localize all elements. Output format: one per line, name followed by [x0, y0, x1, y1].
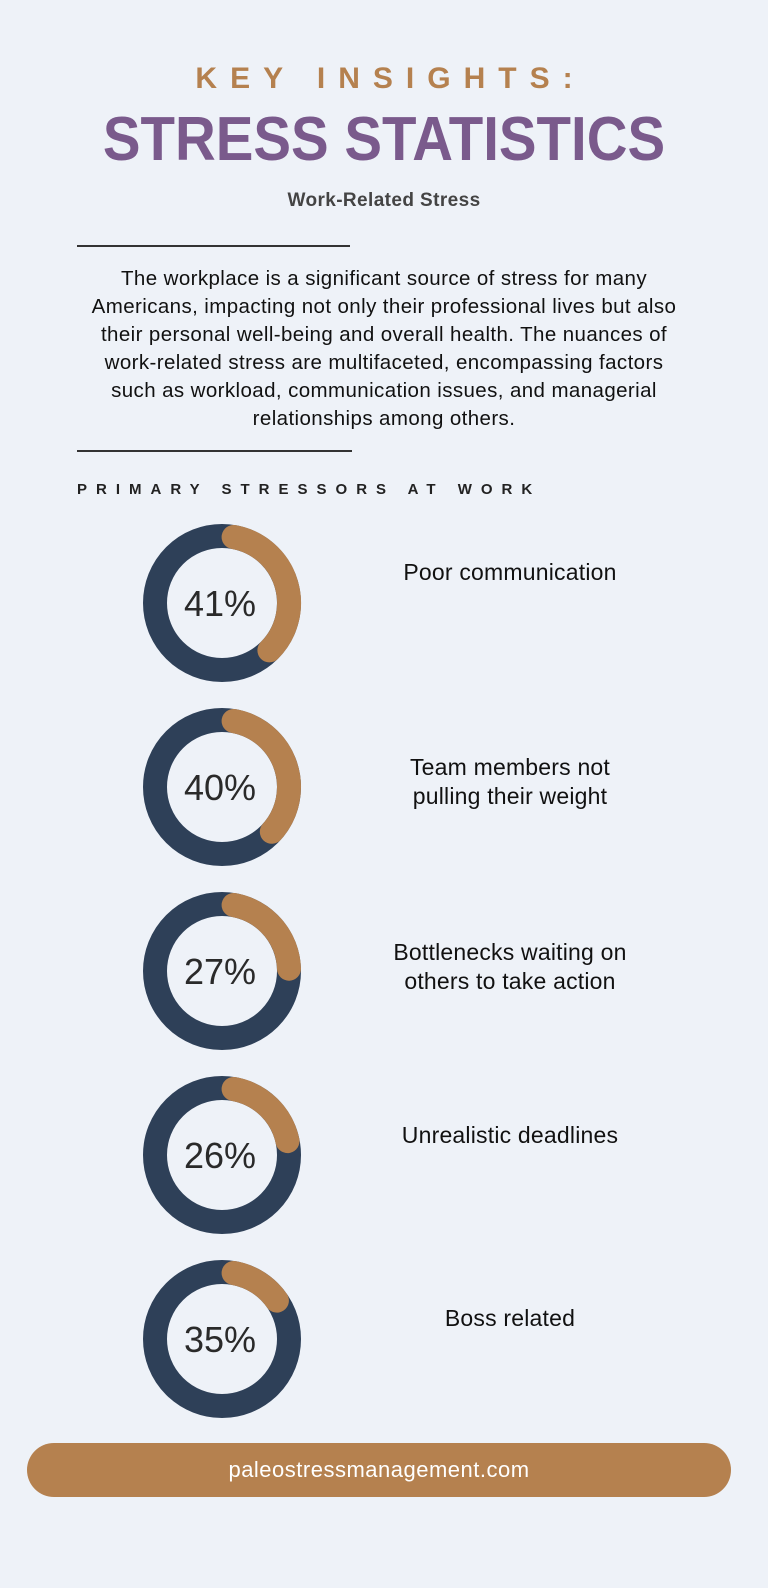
label: team members: Team members not	[410, 754, 610, 780]
donut: 27%: 27%	[184, 951, 256, 992]
label: bottlenecks: Bottlenecks waiting on	[393, 939, 627, 965]
label: bottlenecks: others to take action	[404, 968, 616, 994]
title: key insights: KEY INSIGHTS:	[195, 62, 586, 95]
donut: 35%: 35%	[184, 1319, 256, 1360]
label: team members: pulling their weight	[413, 783, 607, 809]
donut: 35%	[155, 1272, 289, 1406]
footer pill	[27, 1443, 731, 1497]
donut: 27%	[155, 904, 289, 1038]
donut: 26%	[155, 1088, 289, 1222]
donut: 41%: 41%	[184, 583, 256, 624]
label: poor communication: Poor communication	[403, 559, 617, 585]
title: stress statistics: STRESS STATISTICS	[103, 105, 665, 174]
subtitle: Work-Related Stress	[287, 190, 481, 211]
donut: 40%: 40%	[184, 767, 256, 808]
donut: 41%	[155, 536, 289, 670]
label: boss: Boss related	[445, 1305, 575, 1331]
section heading: PRIMARY STRESSORS AT WORK	[77, 481, 541, 498]
intro paragraph: The workplace is a significant source of stress for many Americans, impacting not only their professional lives but also their personal well-being and overall health. The nuances of work-related stress are multifaceted, encompassing factors such as workload, communication issues, and managerial relationships among others.	[92, 267, 676, 430]
donut: 26%: 26%	[184, 1135, 256, 1176]
label: bottlenecks	[393, 939, 627, 994]
footer pill: paleostressmanagement.com	[228, 1457, 530, 1482]
label: team members	[410, 754, 610, 809]
label: deadlines: Unrealistic deadlines	[402, 1122, 618, 1148]
donut: 40%	[155, 720, 289, 854]
